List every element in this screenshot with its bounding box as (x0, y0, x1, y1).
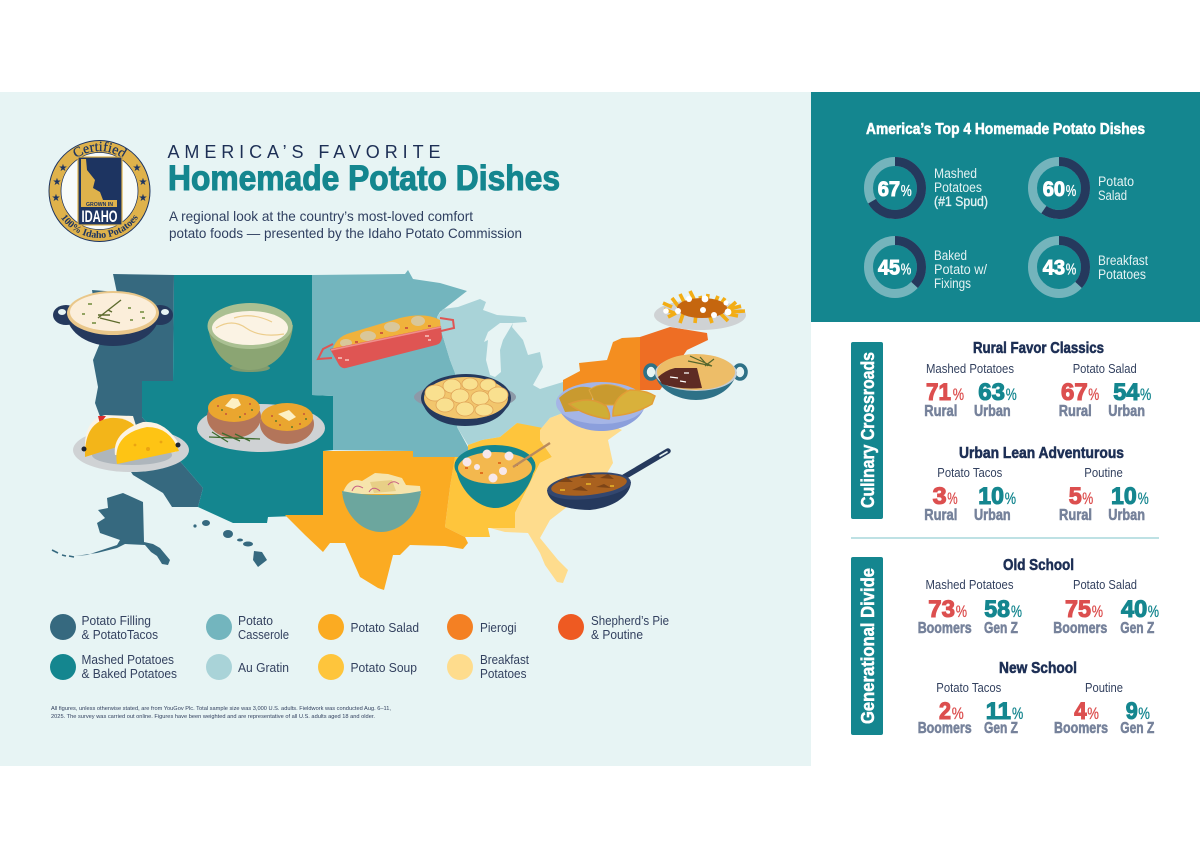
stat: potato salad rural vs urban: % (1140, 385, 1151, 404)
region: Kentucky to Mississippi, potato soup (445, 423, 552, 537)
donut: mashed potatoes 67%: % (901, 183, 912, 200)
stat: poutine boomers vs gen z: Gen Z (1120, 720, 1155, 737)
food: poutine on a plate (654, 291, 746, 330)
subtitle: A regional look at the country’s most-loved comfort (169, 208, 473, 224)
legend: mashed and baked potatoes: Mashed Potatoes (82, 652, 174, 667)
subtitle (169, 208, 522, 241)
tab: Generational Divide (851, 557, 883, 735)
stat: potato tacos boomers vs gen z: % (1012, 704, 1023, 723)
food: au gratin in dark pan (414, 374, 516, 426)
logo: Certified Grown in Idaho seal: ★ (139, 193, 148, 204)
region: Mid-Atlantic, pierogi (563, 337, 640, 413)
legend: au gratin (206, 654, 289, 680)
stat: potato salad boomers vs gen z (1053, 578, 1159, 637)
stat: potato salad boomers vs gen z: Boomers (1053, 620, 1107, 637)
legend: potato salad: Potato Salad (350, 620, 419, 635)
stat: mashed potatoes boomers vs gen z: % (956, 602, 967, 621)
stat: poutine rural vs urban: Urban (1108, 507, 1145, 524)
stat: potato salad boomers vs gen z: % (1148, 602, 1159, 621)
legend: pierogi (447, 614, 517, 640)
donut: breakfast potatoes 43%: Breakfast (1098, 253, 1148, 268)
food: pierogi on periwinkle plate (556, 382, 655, 431)
stat: mashed potatoes rural vs urban: 63 (978, 379, 1005, 406)
stat: poutine boomers vs gen z: % (1138, 704, 1150, 723)
footnote: 2025. The survey was carried out online. Figures have been weighted and are representative of all U.S. adults aged 18 and older. (51, 714, 375, 720)
region: West, potato filling and tacos (92, 274, 203, 507)
stat: poutine boomers vs gen z: % (1087, 704, 1099, 723)
stat: poutine boomers vs gen z: 4 (1074, 698, 1087, 725)
region: South Central, potato salad (285, 451, 468, 590)
stat: potato salad rural vs urban: 54 (1113, 379, 1140, 406)
stat: mashed potatoes rural vs urban: % (953, 385, 964, 404)
legend: mashed and baked potatoes (50, 652, 177, 681)
Lake Michigan (484, 323, 513, 377)
stat: potato tacos rural vs urban (924, 466, 1016, 524)
donut: mashed potatoes 67%: (#1 Spud) (934, 194, 988, 209)
region: Mountain, mashed and baked potatoes (142, 275, 333, 523)
donut: potato salad 60%: % (1066, 183, 1076, 200)
logo: Certified Grown in Idaho seal: 100% Idaho Potatoes (61, 214, 138, 238)
stat: potato salad rural vs urban: Rural (1059, 403, 1092, 420)
section: Old School (918, 557, 1159, 637)
legend: breakfast potatoes (447, 652, 529, 681)
Aleutian islands (52, 550, 74, 557)
donut: potato salad 60% (1032, 162, 1134, 214)
stat: potato salad boomers vs gen z: 75 (1065, 596, 1091, 623)
title (168, 142, 560, 198)
legend: potato soup: Potato Soup (350, 660, 417, 675)
food: baked potatoes on a plate (197, 394, 325, 452)
legend: breakfast potatoes: Potatoes (480, 666, 527, 681)
donut: baked potato 45%: Fixings (934, 276, 971, 291)
legend: potato soup (318, 654, 417, 680)
donut: breakfast potatoes 43%: 43 (1043, 256, 1065, 280)
stat: potato salad rural vs urban: Urban (1108, 403, 1145, 420)
logo: Certified Grown in Idaho seal: ★ (53, 177, 62, 188)
food: shepherd's pie in teal pan (645, 354, 746, 400)
legend: potato casserole (206, 613, 289, 642)
section: New School (918, 660, 1155, 737)
logo: Certified Grown in Idaho seal: ★ (52, 193, 61, 204)
logo: Certified Grown in Idaho seal: Certified (73, 142, 127, 158)
title: AMERICA’S FAVORITE (168, 142, 440, 162)
legend: shepherd's pie and poutine (558, 613, 669, 642)
stat: poutine boomers vs gen z: Poutine (1085, 681, 1123, 695)
section: Rural Favor Classics (924, 340, 1151, 420)
food: mashed potatoes in green bowl (208, 303, 293, 372)
legend: potato casserole: Potato (238, 613, 273, 628)
donut: mashed potatoes 67%: Mashed (934, 166, 977, 181)
legend: potato casserole: Casserole (238, 627, 289, 642)
stat: potato tacos rural vs urban: Potato Tacos (937, 466, 1002, 480)
logo: Certified Grown in Idaho seal: IDAHO (82, 207, 118, 226)
stat: poutine boomers vs gen z (1054, 681, 1155, 737)
stat: potato salad rural vs urban: Potato Salad (1073, 362, 1137, 376)
stat: poutine rural vs urban (1059, 466, 1149, 524)
legend: potato filling and tacos (50, 613, 158, 642)
legend: breakfast potatoes: Breakfast (480, 652, 529, 667)
section: Old School: Old School (1003, 557, 1074, 574)
stat: mashed potatoes boomers vs gen z: Boomers (918, 620, 972, 637)
stat: potato tacos boomers vs gen z: 11 (986, 698, 1011, 725)
stat: mashed potatoes boomers vs gen z: Gen Z (984, 620, 1018, 637)
stat: poutine rural vs urban: Rural (1059, 507, 1092, 524)
top 4 heading: America’s Top 4 Homemade Potato Dishes (866, 121, 1145, 138)
stat: mashed potatoes rural vs urban: 71 (926, 379, 951, 406)
Alaska (75, 493, 170, 565)
stat: potato salad boomers vs gen z: Potato Salad (1073, 578, 1137, 592)
donut: breakfast potatoes 43%: % (1066, 262, 1076, 278)
stat: potato tacos rural vs urban: 10 (978, 483, 1004, 510)
section: Urban Lean Adventurous: Urban Lean Adventurous (959, 445, 1124, 462)
stat: mashed potatoes rural vs urban: Rural (924, 403, 957, 420)
stat: mashed potatoes rural vs urban: Urban (974, 403, 1011, 420)
legend: au gratin: Au Gratin (238, 660, 289, 675)
donut: potato salad 60%: Potato (1098, 174, 1134, 189)
stat: mashed potatoes rural vs urban (924, 362, 1017, 420)
stat: mashed potatoes boomers vs gen z: 73 (928, 596, 955, 623)
region: Plains, potato casserole (312, 270, 468, 457)
region: New England, shepherd's pie and poutine (640, 327, 708, 390)
stat: mashed potatoes boomers vs gen z: 58 (984, 596, 1010, 623)
donut: potato salad 60%: 60 (1043, 178, 1065, 201)
section: Urban Lean Adventurous (924, 445, 1149, 524)
logo: Certified Grown in Idaho seal: ★ (133, 163, 142, 174)
stat: poutine rural vs urban: % (1082, 489, 1093, 508)
legend: shepherd's pie and poutine: Shepherd’s Pie (591, 613, 669, 628)
donut: mashed potatoes 67%: 67 (878, 178, 900, 201)
logo: Certified Grown in Idaho seal: ★ (59, 163, 68, 174)
map of the United States by favorite dish (52, 270, 708, 590)
Hawaii (193, 520, 267, 567)
donut: baked potato 45%: % (901, 262, 911, 278)
legend: potato filling and tacos: Potato Filling (82, 613, 151, 628)
stat: potato tacos rural vs urban: % (1005, 489, 1016, 508)
stat: potato tacos rural vs urban: Urban (974, 507, 1011, 524)
panel: top 4 homemade potato dishes (811, 92, 1200, 322)
stat: poutine rural vs urban: 10 (1111, 483, 1137, 510)
region: Southeast, breakfast potatoes (488, 413, 622, 583)
stat: poutine rural vs urban: 5 (1069, 483, 1082, 510)
stat: mashed potatoes rural vs urban: % (1006, 385, 1017, 404)
legend: pierogi: Pierogi (480, 620, 517, 635)
legend: mashed and baked potatoes: & Baked Potatoes (82, 666, 177, 681)
stat: potato tacos boomers vs gen z: % (952, 704, 964, 723)
donut: breakfast potatoes 43%: Potatoes (1098, 267, 1146, 282)
tab: Culinary Crossroads: Culinary Crossroads (858, 352, 878, 508)
title: Homemade Potato Dishes (168, 159, 560, 198)
donut: baked potato 45%: Baked (934, 248, 967, 263)
stat: potato salad rural vs urban: 67 (1061, 379, 1088, 406)
section: Rural Favor Classics: Rural Favor Classics (973, 340, 1104, 357)
stat: mashed potatoes boomers vs gen z: Mashed Potatoes (926, 578, 1014, 592)
stat: poutine rural vs urban: % (1138, 489, 1149, 508)
stat: potato tacos boomers vs gen z: Potato Tacos (936, 681, 1001, 695)
stat: mashed potatoes boomers vs gen z: % (1011, 602, 1022, 621)
stat: potato tacos boomers vs gen z: Gen Z (984, 720, 1018, 737)
legend: shepherd's pie and poutine: & Poutine (591, 627, 643, 642)
donut: mashed potatoes 67%: Potatoes (934, 180, 982, 195)
stat: poutine boomers vs gen z: 9 (1126, 698, 1138, 725)
stat: potato tacos rural vs urban: 3 (933, 483, 947, 510)
stat: poutine boomers vs gen z: Boomers (1054, 720, 1108, 737)
stat: potato tacos rural vs urban: Rural (924, 507, 957, 524)
legend (50, 613, 669, 681)
stat: potato salad boomers vs gen z: Gen Z (1120, 620, 1155, 637)
region: Great Lakes, au gratin (437, 299, 563, 445)
donut: baked potato 45% (868, 240, 987, 294)
logo: Certified Grown in Idaho seal (48, 140, 150, 242)
stat: potato tacos boomers vs gen z: Boomers (918, 720, 972, 737)
donut: baked potato 45%: Potato w/ (934, 262, 987, 277)
food: gratin in navy pan, Pacific (53, 291, 173, 346)
footnote: All figures, unless otherwise stated, are from YouGov Plc. Total sample size was 3,000 U.S. adults. Fieldwork was conducted Aug. 6–11, (51, 706, 391, 712)
tab: Culinary Crossroads (851, 342, 883, 519)
panel: map background (0, 92, 811, 766)
stat: potato tacos boomers vs gen z: 2 (939, 698, 951, 725)
donut: breakfast potatoes 43% (1032, 240, 1148, 294)
logo: Certified Grown in Idaho seal: GROWN IN (86, 202, 113, 208)
stat: poutine rural vs urban: Poutine (1084, 466, 1123, 480)
stat: potato tacos boomers vs gen z (918, 681, 1023, 737)
donut: mashed potatoes 67% (868, 162, 988, 214)
stat: potato salad boomers vs gen z: 40 (1121, 596, 1147, 623)
legend: potato salad (318, 614, 419, 640)
tab: Generational Divide: Generational Divide (858, 568, 878, 724)
food: potato casserole in red dish (318, 315, 454, 368)
stat: potato salad boomers vs gen z: % (1092, 602, 1103, 621)
subtitle: potato foods — presented by the Idaho Potato Commission (169, 225, 522, 241)
food: tacos on a plate (73, 415, 189, 472)
food: potato salad in teal bowl (342, 473, 421, 532)
section: New School: New School (999, 660, 1077, 677)
donut: baked potato 45%: 45 (878, 256, 900, 280)
stat: potato salad rural vs urban: % (1088, 385, 1099, 404)
food: skillet of breakfast potatoes (546, 451, 668, 510)
legend: potato filling and tacos: & PotatoTacos (82, 627, 158, 642)
stat: mashed potatoes boomers vs gen z (918, 578, 1022, 637)
footnote (51, 706, 391, 720)
stat: mashed potatoes rural vs urban: Mashed Potatoes (926, 362, 1014, 376)
stat: potato tacos rural vs urban: % (947, 489, 958, 508)
donut: potato salad 60%: Salad (1098, 188, 1127, 203)
stat: potato salad rural vs urban (1059, 362, 1151, 420)
food: potato soup in teal bowl (454, 443, 550, 508)
logo: Certified Grown in Idaho seal: ★ (139, 177, 148, 188)
